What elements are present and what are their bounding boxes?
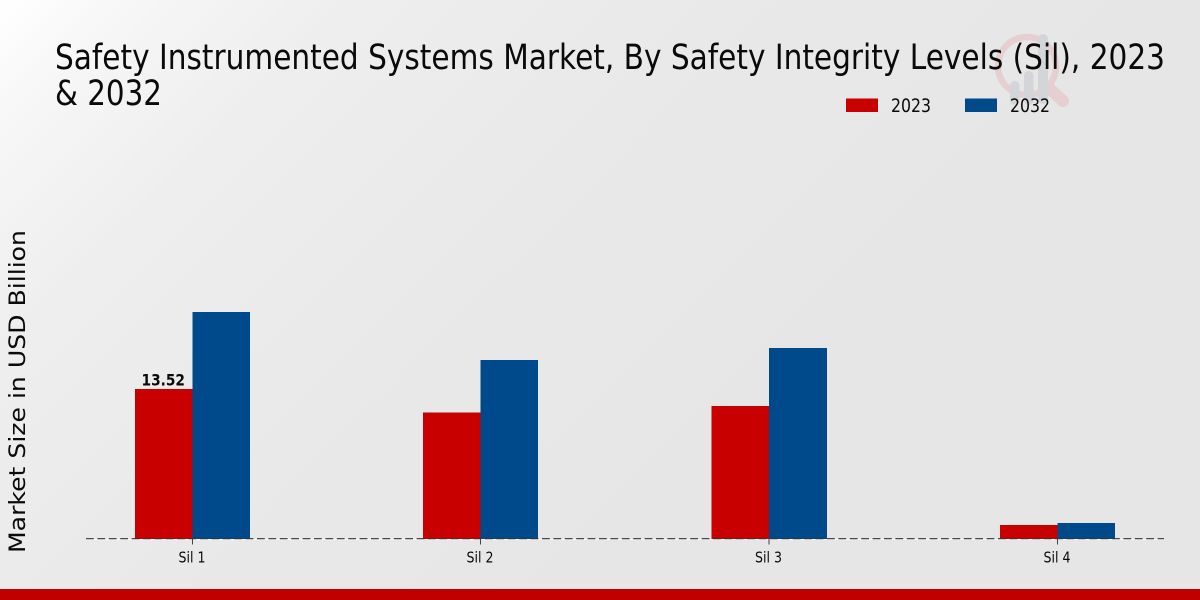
title bbox=[55, 38, 1165, 114]
legend item: 2023 bbox=[846, 95, 931, 117]
footer bar bbox=[0, 589, 1200, 600]
group: Sil 4 bbox=[1000, 523, 1115, 539]
group: Sil 1 bbox=[135, 312, 250, 539]
legend bbox=[846, 95, 1050, 117]
x-axis labels: Sil 2 bbox=[466, 548, 494, 566]
data label: 13.52: 13.52 bbox=[142, 370, 185, 390]
group: Sil 2 bbox=[423, 360, 538, 539]
title: & 2032 bbox=[55, 74, 162, 114]
legend item: 2032: 2032 bbox=[1010, 95, 1050, 117]
x-axis labels: Sil 4 bbox=[1044, 548, 1070, 566]
watermark logo bbox=[998, 34, 1063, 105]
bar chart bbox=[86, 312, 1164, 544]
legend item: 2032 bbox=[965, 95, 1050, 117]
x-axis labels: Sil 3 bbox=[755, 548, 782, 566]
x-axis labels: Sil 1 bbox=[178, 548, 206, 566]
legend item: 2023: 2023 bbox=[891, 95, 931, 117]
x-axis labels bbox=[178, 548, 1070, 566]
y-axis label: Market Size in USD Billion bbox=[5, 230, 31, 553]
baseline bbox=[86, 538, 1164, 540]
group: Sil 3 bbox=[712, 348, 827, 539]
